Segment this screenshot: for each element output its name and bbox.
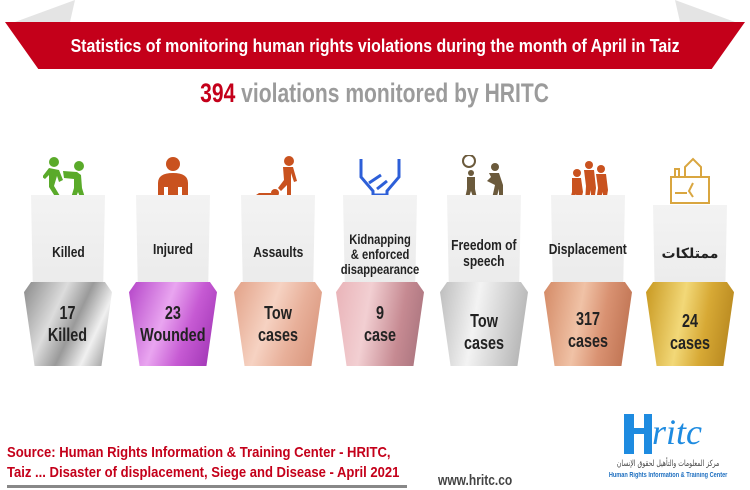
card: assaults	[234, 156, 322, 366]
card: kidnapping: Kidnapping	[349, 231, 411, 247]
card: injured: Wounded	[140, 325, 206, 345]
icon: speech	[462, 155, 503, 195]
card: kidnapping: & enforced	[351, 246, 409, 262]
card: assaults: Assaults	[253, 244, 303, 261]
card: displacement: cases	[568, 331, 608, 351]
icon: assault	[256, 156, 297, 195]
source text: Taiz ... Disaster of displacement, Siege and Disease - April 2021	[7, 464, 399, 481]
card: injured	[129, 157, 217, 366]
banner ears	[16, 0, 734, 22]
website: www.hritc.co	[438, 472, 512, 489]
card: freedom of speech: speech	[463, 253, 505, 270]
icon: fighting	[43, 157, 84, 195]
subtitle: 394 violations monitored by HRITC	[201, 78, 549, 108]
card: displacement: Displacement	[549, 241, 627, 258]
card: freedom of speech: Tow	[470, 311, 498, 331]
logo: Human Rights Information & Training Center	[609, 472, 727, 479]
card: displacement: 317	[576, 309, 600, 329]
card: killed: Killed	[52, 244, 84, 261]
card: kidnapping: 9	[376, 303, 384, 323]
card: assaults: cases	[258, 325, 298, 345]
title banner	[5, 22, 745, 69]
card: properties: ممتلكات	[662, 246, 718, 262]
logo: ritc	[652, 412, 702, 452]
logo: مركز المعلومات والتأهيل لحقوق الإنسان	[617, 459, 719, 469]
card: killed: Killed	[48, 325, 88, 345]
card: displacement	[544, 161, 632, 366]
source text	[7, 443, 407, 488]
card: properties	[646, 158, 734, 366]
card: freedom of speech: Freedom of	[451, 237, 517, 254]
card: kidnapping: disappearance	[341, 261, 419, 277]
icon: hands	[360, 159, 400, 195]
card: killed	[24, 157, 112, 366]
card: freedom of speech: cases	[464, 333, 504, 353]
card: properties: cases	[670, 333, 710, 353]
logo	[609, 412, 728, 479]
icon: people walking	[571, 161, 608, 195]
card: killed: 17	[60, 303, 76, 323]
card: kidnapping	[336, 159, 424, 366]
source text: Source: Human Rights Information & Training Center - HRITC,	[7, 444, 391, 461]
title banner: Statistics of monitoring human rights violations during the month of April in Taiz	[70, 35, 679, 56]
card: injured: Injured	[153, 241, 193, 258]
card: kidnapping: case	[364, 325, 396, 345]
card: freedom of speech	[440, 155, 528, 366]
card: properties: 24	[682, 311, 698, 331]
card: injured: 23	[165, 303, 181, 323]
card: assaults: Tow	[264, 303, 292, 323]
icon: injured person	[158, 157, 188, 195]
icon: ruined house	[670, 158, 710, 204]
